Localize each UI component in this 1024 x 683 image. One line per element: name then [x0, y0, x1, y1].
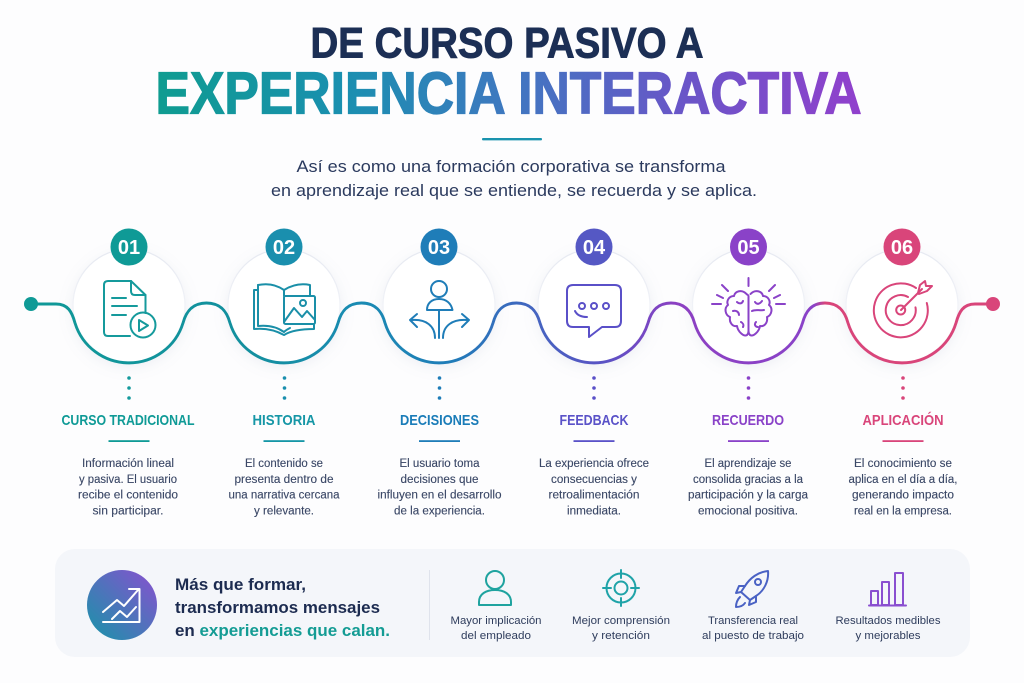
badge 01: 01	[118, 237, 140, 259]
icon: brain with rays	[712, 278, 785, 335]
badge 01	[110, 228, 148, 266]
step 4: feedback: consecuencias y	[551, 474, 637, 486]
badge 04: 04	[583, 237, 606, 259]
icon: document with play	[104, 281, 156, 338]
step 5: memory: consolida gracias a la	[693, 474, 804, 486]
badge 05: 05	[737, 237, 760, 259]
badge 06	[884, 228, 920, 266]
badge 03	[420, 228, 458, 266]
benefit: results: Resultados medibles	[836, 615, 941, 627]
summary message: en experiencias que calan.	[175, 621, 390, 640]
benefit: transfer: al puesto de trabajo	[702, 630, 804, 642]
step 6: application: aplica en el día a día,	[848, 474, 958, 486]
benefit: engagement: del empleado	[461, 630, 531, 642]
step 1: traditional course: recibe el contenido	[78, 490, 178, 502]
step 5: memory: RECUERDO	[712, 412, 784, 429]
summary message: transformamos mensajes	[175, 598, 380, 617]
benefit: results	[836, 573, 941, 642]
step 3: decisions: de la experiencia.	[394, 506, 485, 518]
step 6: application: real en la empresa.	[854, 506, 952, 518]
step 5: memory: participación y la carga	[688, 490, 809, 502]
benefit: engagement: Mayor implicación	[450, 615, 542, 627]
timeline step bubbles	[73, 249, 958, 361]
step 3: decisions: decisiones que	[400, 474, 478, 486]
step 1: traditional course	[62, 376, 194, 518]
step 1: traditional course: Información lineal	[82, 458, 174, 470]
step 6: application: generando impacto	[852, 490, 954, 502]
icon: open book with picture	[254, 284, 315, 335]
step 2: story	[228, 376, 340, 518]
benefit: transfer: Transferencia real	[708, 615, 798, 627]
step 6: application	[848, 376, 958, 518]
step 1: traditional course: CURSO TRADICIONAL	[62, 412, 194, 429]
step 1: traditional course: y pasiva. El usuario	[79, 474, 177, 486]
title: DE CURSO PASIVO A	[310, 20, 704, 68]
subtitle: Así es como una formación corporativa se transforma	[296, 157, 726, 176]
step 4: feedback: inmediata.	[567, 506, 621, 518]
benefit: comprehension: y retención	[592, 630, 650, 642]
step 6: application: APLICACIÓN	[862, 411, 944, 429]
step 3: decisions: influyen en el desarrollo	[378, 490, 502, 502]
step 4: feedback	[539, 376, 649, 518]
step 3: decisions: El usuario toma	[400, 458, 480, 470]
title	[156, 20, 862, 126]
step 4: feedback: La experiencia ofrece	[539, 458, 649, 470]
icon: speech bubble	[567, 285, 621, 337]
step 6: application: El conocimiento se	[854, 458, 952, 470]
summary message	[175, 575, 390, 640]
step 3: decisions: DECISIONES	[400, 412, 479, 429]
badge 06: 06	[891, 237, 913, 259]
benefit: transfer	[702, 571, 804, 642]
icon: target with arrow	[874, 281, 932, 337]
badge 05	[730, 228, 767, 266]
subtitle: en aprendizaje real que se entiende, se recuerda y se aplica.	[271, 181, 757, 200]
step 5: memory	[688, 376, 809, 518]
panel: bottom summary	[55, 549, 970, 657]
benefit: results: y mejorables	[856, 630, 921, 642]
benefit: engagement	[450, 571, 542, 642]
badge 02	[266, 228, 302, 266]
step 4: feedback: FEEDBACK	[560, 412, 629, 429]
timeline wave line	[24, 297, 1000, 363]
subtitle	[271, 157, 757, 200]
step 1: traditional course: sin participar.	[92, 506, 164, 518]
badge 03: 03	[428, 237, 450, 259]
step 2: story: y relevante.	[254, 506, 314, 518]
benefit: comprehension: Mejor comprensión	[572, 615, 670, 627]
badge 02: 02	[273, 237, 295, 259]
step 4: feedback: retroalimentación	[548, 490, 640, 502]
step 5: memory: El aprendizaje se	[704, 458, 792, 470]
step 5: memory: emocional positiva.	[698, 506, 798, 518]
summary message: Más que formar,	[175, 575, 306, 594]
title: EXPERIENCIA INTERACTIVA	[156, 60, 862, 126]
badge 04	[576, 228, 612, 266]
step 2: story: presenta dentro de	[234, 474, 334, 486]
benefit: comprehension	[572, 570, 670, 642]
step 2: story: HISTORIA	[252, 412, 316, 429]
step 2: story: una narrativa cercana	[228, 490, 340, 502]
step 3: decisions	[378, 376, 502, 518]
icon: person choosing paths	[410, 281, 469, 338]
icon: growth chart circle	[87, 570, 157, 640]
step 2: story: El contenido se	[245, 458, 323, 470]
